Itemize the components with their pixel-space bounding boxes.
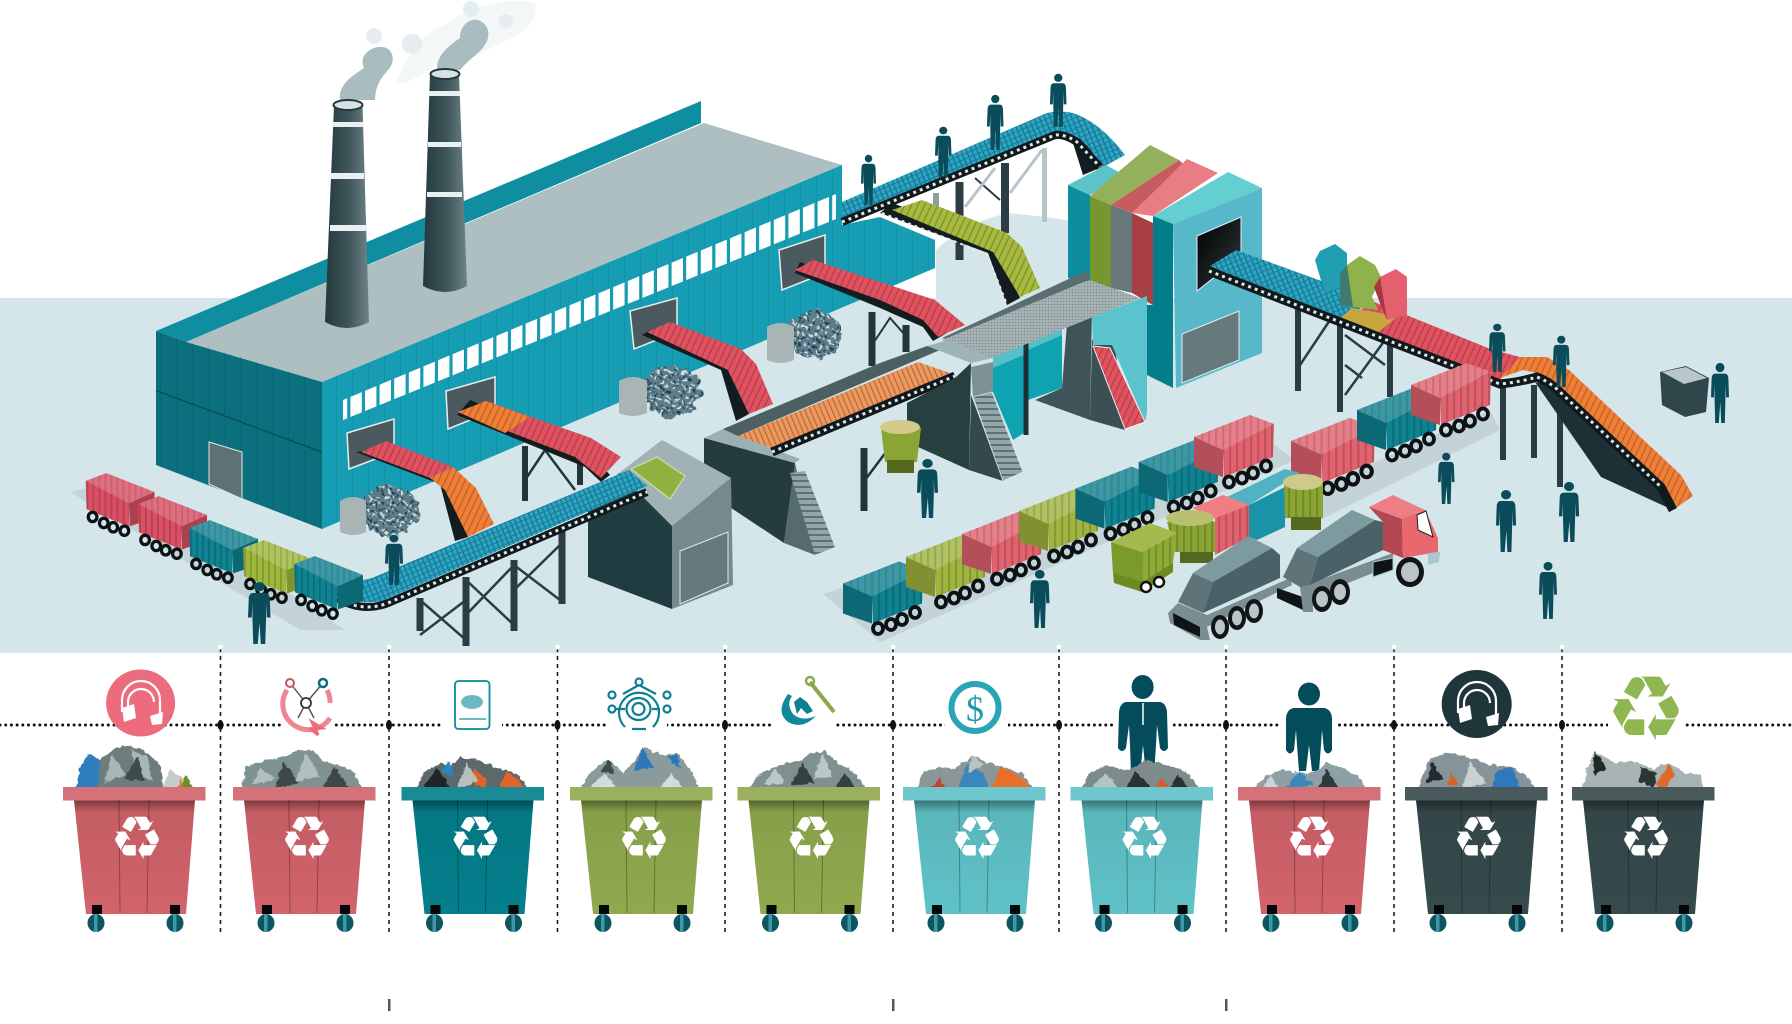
bin 7 with trash (1070, 760, 1213, 932)
support side wedge (969, 395, 1003, 481)
center stairs (973, 392, 1023, 481)
scrap pile and drum middle (619, 366, 701, 416)
right green bucket (1284, 479, 1323, 518)
bin 6 with trash (903, 755, 1046, 932)
right long conveyor legs (1298, 305, 1560, 487)
icon: green recycling symbol: ♻ (1606, 657, 1686, 762)
green chute (880, 200, 1040, 305)
bin 2 with trash: ♻ (280, 804, 334, 874)
red chute C (630, 298, 773, 421)
red orange chute A (347, 419, 494, 541)
bin 9 with trash (1405, 753, 1548, 932)
right teal wall (1092, 296, 1147, 422)
right long conveyor (1209, 250, 1693, 510)
line crossing nodes (218, 720, 1565, 730)
scrap pile and drum lower (340, 486, 418, 536)
green hopper cart (880, 420, 921, 473)
front wagon row (823, 415, 1295, 642)
dark ramp block (1035, 308, 1092, 420)
bin 5 with trash (738, 751, 880, 932)
middle containers (1111, 469, 1323, 592)
center concrete support (907, 340, 1023, 481)
icon: pink headset badge (106, 670, 175, 736)
chimney right (423, 69, 467, 292)
bin 7 with trash: ♻ (1118, 804, 1171, 874)
chimney smoke (340, 1, 536, 100)
icon: mobile phone (443, 678, 502, 732)
sorter door (680, 532, 728, 604)
left wagon train (70, 473, 363, 630)
factory roof (186, 123, 842, 382)
tower black opening (1197, 217, 1241, 291)
roof parapet (156, 101, 701, 342)
teal container (1227, 469, 1300, 505)
chute A window (347, 419, 394, 469)
icon: dollar coin (945, 678, 1008, 732)
bin 1 with trash: ♻ (110, 804, 164, 874)
icon: person in suit (1113, 672, 1173, 775)
support cap (927, 340, 993, 363)
vertical dashed dividers (220, 648, 1562, 932)
icon: wrench and workers (773, 676, 835, 730)
red chute B (446, 377, 621, 501)
icon: person standing (1280, 680, 1338, 771)
right wagon row (1291, 363, 1500, 530)
ground plane (0, 298, 1792, 653)
bin 1 with trash (63, 745, 206, 932)
factory left wall (156, 331, 322, 529)
grey sorter box (588, 440, 733, 609)
bin 2 with trash (233, 750, 376, 932)
bin 5 with trash: ♻ (785, 804, 838, 874)
truck (1168, 495, 1440, 640)
red chute D (779, 235, 965, 366)
conveyor hoods (1315, 244, 1407, 320)
support dark face (907, 363, 971, 470)
chimney left (325, 100, 369, 328)
green cart (1113, 563, 1173, 592)
tractor body (1283, 548, 1318, 587)
tower door (1182, 311, 1239, 383)
sorter green hopper (631, 457, 685, 499)
horizontal dotted line (0, 724, 1792, 726)
chute B window (446, 377, 495, 429)
bin 3 with trash (402, 757, 544, 932)
bin 8 with trash: ♻ (1285, 804, 1339, 874)
bin 10 with trash: ♻ (1619, 804, 1673, 874)
icon: connected target (606, 678, 670, 732)
teal bridge wall (993, 296, 1147, 440)
colored tower (1068, 145, 1262, 388)
bin 4 with trash (570, 747, 712, 932)
long orange conveyor (723, 346, 955, 511)
dumpster at right (1660, 366, 1709, 417)
middle green bucket (1167, 517, 1215, 552)
pink container (1192, 495, 1249, 518)
divider tips (218, 644, 1564, 650)
chute C window (630, 298, 677, 349)
icon: dollar coin: $ (966, 689, 984, 729)
small red ramp (1093, 346, 1145, 429)
icon: dark headset badge (1442, 670, 1512, 738)
left concrete support (704, 429, 835, 555)
upper blue conveyor (842, 112, 1125, 222)
factory right wall (322, 165, 935, 529)
raised ground behind plant (936, 213, 1100, 300)
factory windows (343, 194, 836, 420)
conveyor legs left (420, 530, 562, 646)
bin 4 with trash: ♻ (617, 804, 671, 874)
support light face (971, 362, 993, 397)
factory building (156, 101, 935, 529)
workers (248, 74, 1729, 644)
truck wheels (1211, 557, 1424, 639)
bin 3 with trash: ♻ (449, 804, 502, 874)
truck cab (1369, 495, 1425, 519)
bin 10 with trash (1572, 751, 1714, 932)
grey bridge deck (942, 270, 1140, 358)
bottom tick marks (388, 999, 1228, 1011)
bin 9 with trash: ♻ (1452, 804, 1506, 874)
lower blue conveyor (333, 470, 647, 607)
scrap pile and drum upper (767, 311, 843, 363)
truck bumper and vent (1428, 552, 1440, 565)
tractor tread and chassis (1277, 588, 1303, 610)
trailer body (1178, 573, 1213, 613)
icon: network cycle arrow (281, 679, 334, 735)
left stairs (790, 471, 835, 555)
bin 8 with trash (1238, 763, 1380, 932)
bin 6 with trash: ♻ (950, 804, 1004, 874)
chute D window (779, 235, 825, 290)
factory door (209, 442, 242, 499)
upper conveyor supports (936, 148, 1044, 260)
trailer frame and tread (1168, 578, 1292, 640)
